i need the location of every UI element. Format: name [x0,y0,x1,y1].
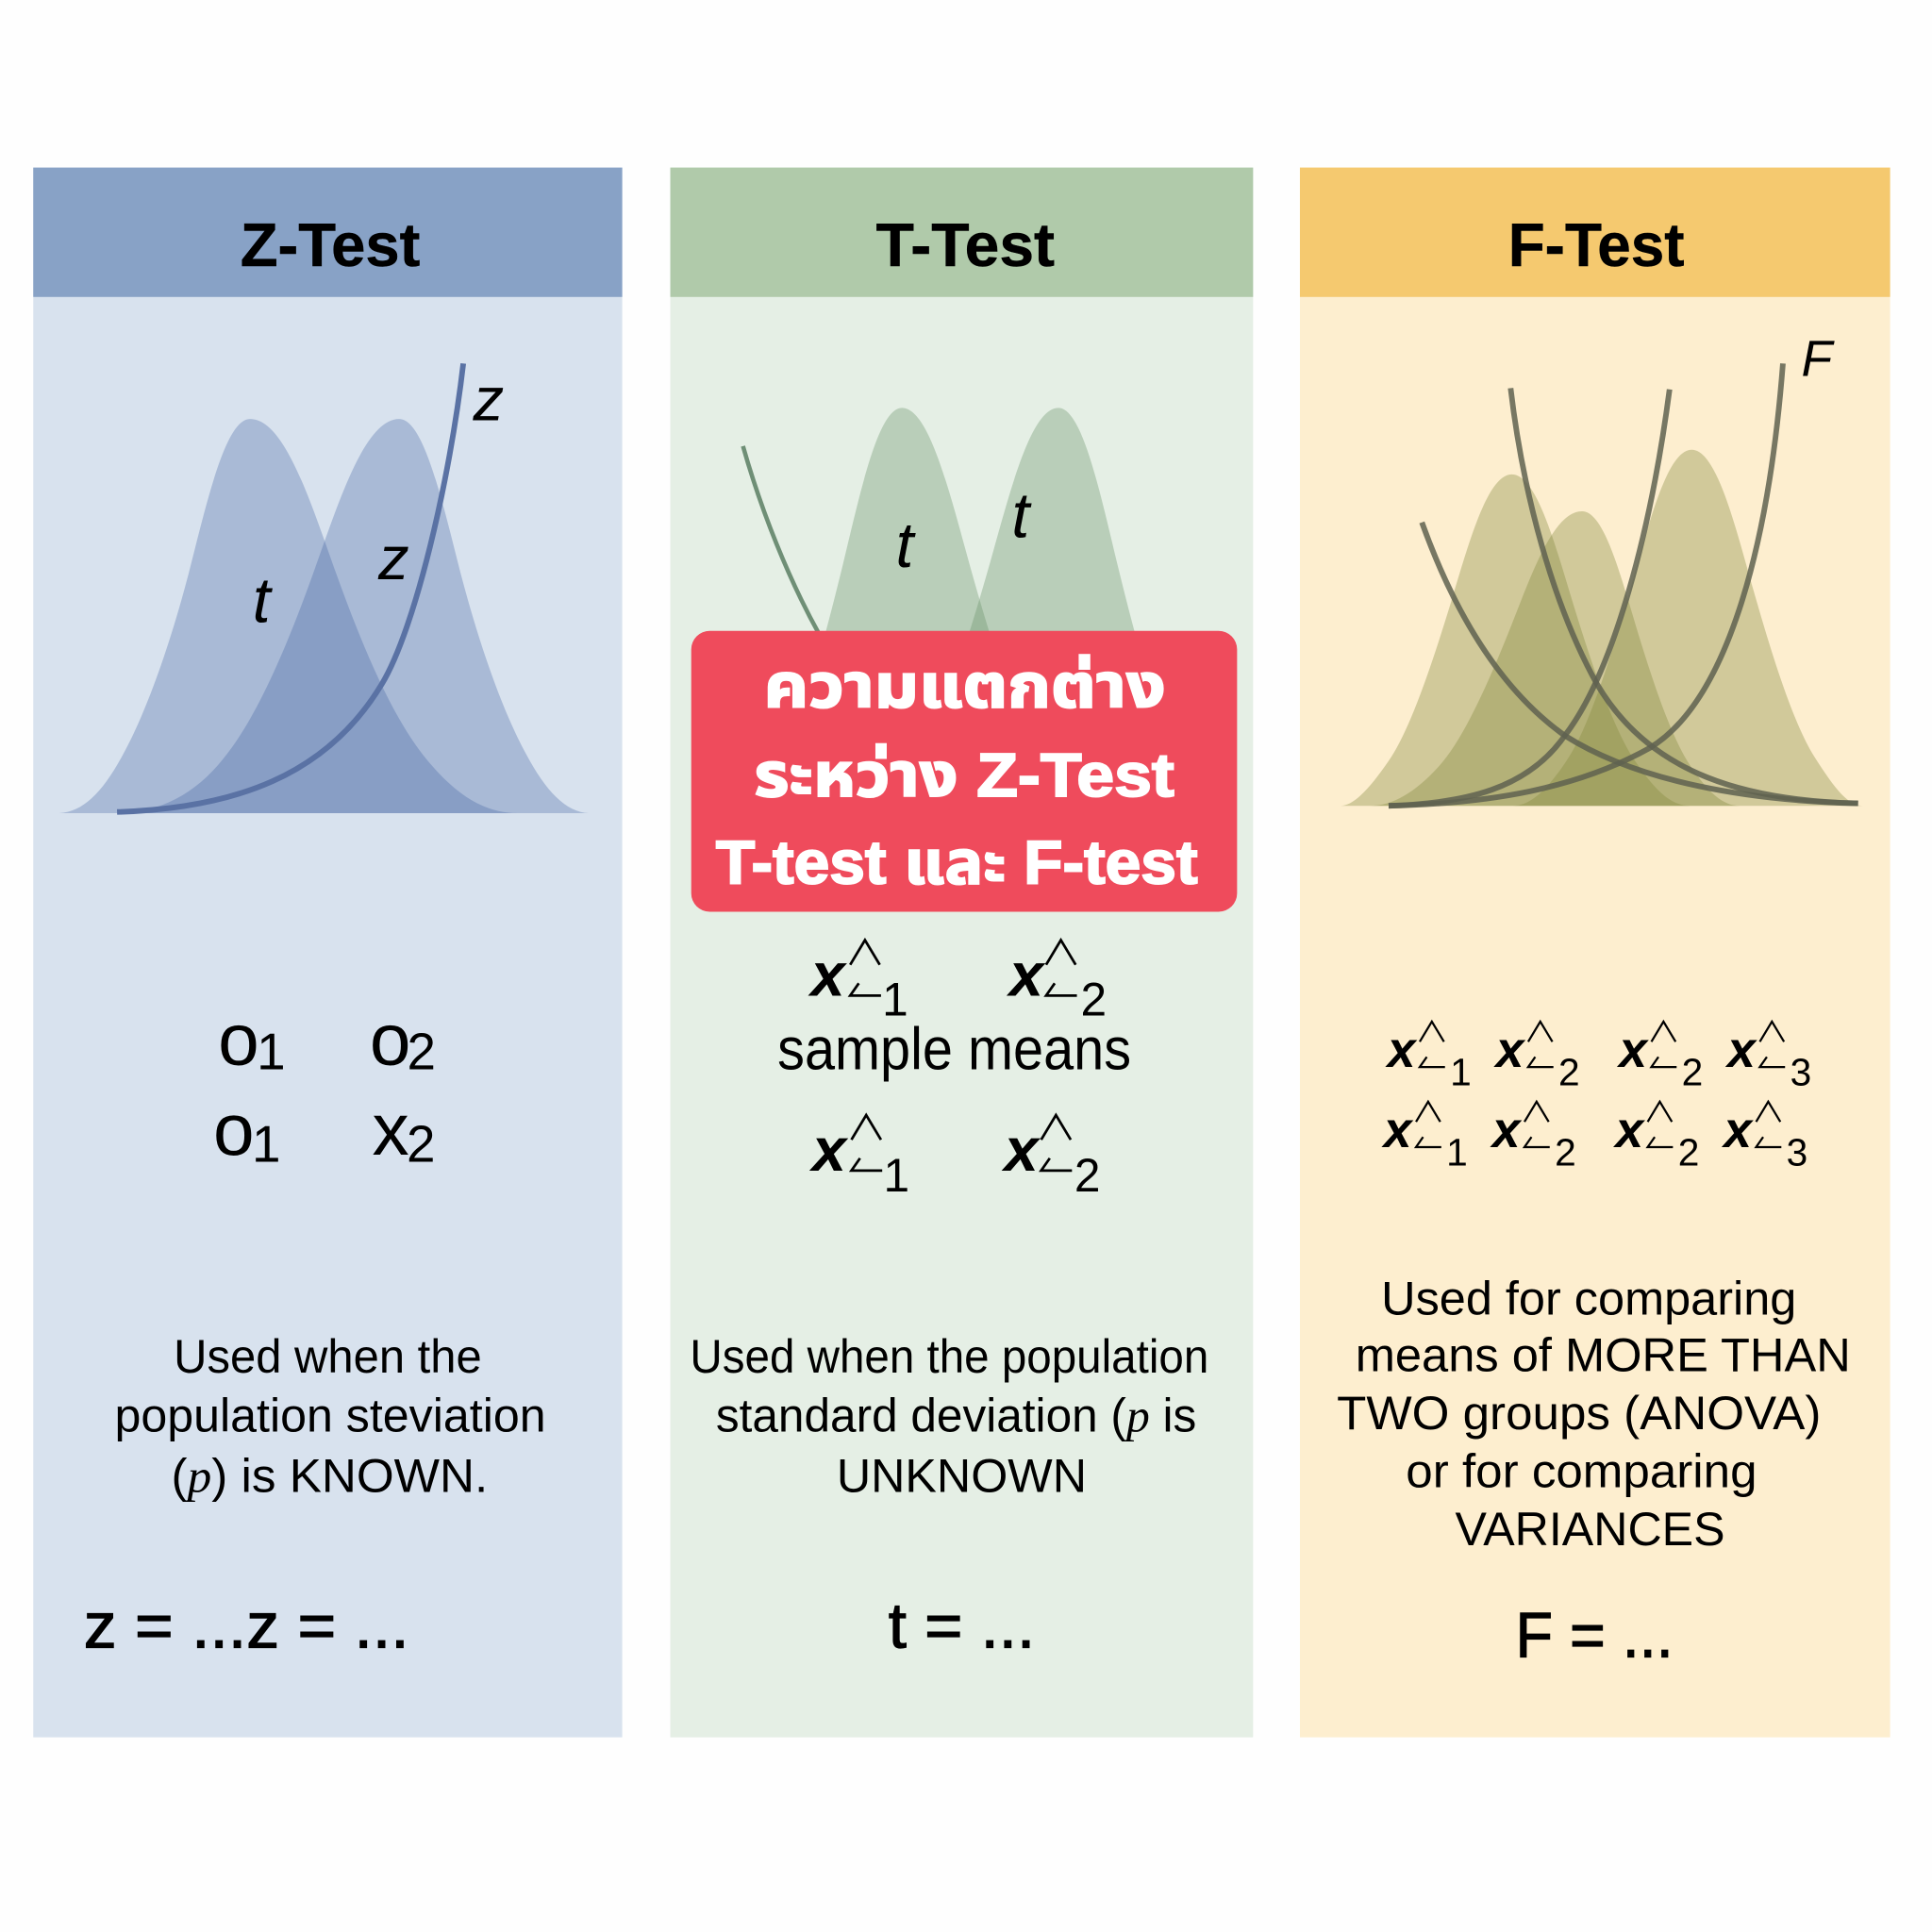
description: T-Test [690,1330,1208,1503]
panel body: T-Test [671,168,1253,1738]
formula: t: t = ... [889,1591,1035,1661]
symbol: x hat 3 row 2: 3 [1787,1130,1807,1174]
symbol: x hat 2 row 2: 2 [1555,1130,1576,1174]
line 1: Used when the [174,1330,482,1383]
symbol: o1 bottom: o [213,1088,255,1171]
symbol: x hat 1 bottom: 1 [883,1149,909,1202]
header band: T-Test [671,168,1253,297]
symbol: x hat 3 row 2 [1721,1102,1807,1174]
distribution curve: right [1513,450,1863,806]
formula: z: z = ...z = ... [84,1591,409,1661]
chart: t distributions [743,408,1176,753]
distribution curve: left [1341,475,1690,806]
line 2: standard deviation (p is [716,1390,1196,1442]
distribution curve: z [117,419,589,813]
distribution curve: t right [921,408,1176,753]
curve label: F: F [1802,331,1836,387]
symbol: x hat 1 row 1: x [1385,1023,1418,1078]
header band: Z-Test [33,168,623,297]
banner line 1: ความแตกต่าง [764,652,1166,721]
line 2: means of MORE THAN [1356,1329,1851,1382]
rising curve: short [1389,390,1670,806]
heading: T-Test: T-Test [876,210,1055,279]
symbol: x hat 1 row 2 [1381,1102,1468,1174]
symbol: o1 top: o [218,997,259,1080]
symbol: x hat 1 bottom: x [809,1115,849,1184]
symbol: o2 top: o [370,997,410,1080]
symbol: x hat 2 row 2 [1490,1102,1576,1174]
distribution curve: t [59,419,518,813]
chart: z distributions [59,363,589,813]
symbol: x hat 1 bottom [809,1115,909,1202]
symbol: x hat 3 row 1: x [1724,1023,1757,1078]
line 4: or for comparing [1406,1444,1757,1497]
curve label: t left: t [896,510,917,581]
symbol: x hat 2 top: x [1007,940,1046,1008]
symbol: x hat 2 row 1: 2 [1558,1050,1580,1093]
rising curve: tall [1389,363,1783,806]
curve label: z upper: z [473,364,504,433]
line 3: TWO groups (ANOVA) [1337,1387,1821,1440]
symbol: x2 bottom: 2 [407,1115,436,1174]
line 1: Used for comparing [1381,1273,1796,1325]
panel: T-Test [671,168,1253,1738]
symbols: group means [1381,1022,1811,1174]
symbol: x hat 1 row 1: 1 [1450,1050,1472,1093]
description: Z-Test [114,1330,546,1503]
symbol: x hat 2b row 1: x [1616,1023,1649,1078]
curve label: t: t [253,566,274,637]
label: sample means: sample means [777,1017,1131,1083]
symbol: x hat 2b row 2: x [1612,1103,1645,1158]
symbol: x hat 1 row 1 [1385,1022,1472,1093]
symbol: x hat 2 bottom: x [1001,1115,1041,1184]
header band: F-Test [1300,168,1890,297]
symbols: sample means [777,940,1131,1202]
heading: F-Test: F-Test [1508,210,1684,279]
heading: Z-Test: Z-Test [241,210,420,279]
symbol: x hat 3 row 1: 3 [1790,1050,1811,1093]
symbol: x hat 2 row 2: x [1490,1103,1523,1158]
symbol: x hat 2 top [1007,940,1107,1025]
symbol: x hat 2 bottom [1001,1115,1101,1202]
symbol: x hat 2 bottom: 2 [1074,1149,1101,1202]
symbol: x hat 1 row 2: x [1381,1103,1414,1158]
line 3: (p) is KNOWN. [172,1450,488,1503]
symbol: x hat 2 row 1 [1493,1022,1580,1093]
description: F-Test [1337,1273,1851,1556]
rising curve: z [117,363,463,812]
symbol: x hat 1 top: x [808,940,847,1008]
falling curve [743,446,820,635]
symbol: x hat 2b row 1 [1616,1022,1703,1093]
line 1: Used when the population [690,1330,1208,1383]
symbol: x hat 2 top: 2 [1080,973,1107,1025]
symbol: o1 top: 1 [257,1023,286,1081]
symbol: x hat 2 row 1: x [1493,1023,1526,1078]
banner: Thai title [691,631,1237,912]
symbol: x hat 1 top: 1 [882,973,908,1025]
falling curve: short [1422,523,1858,804]
panel body: Z-Test [33,168,623,1738]
line 3: UNKNOWN [837,1450,1087,1503]
line 2: population steviation [114,1390,546,1442]
panel body: F-Test [1300,168,1890,1738]
curve label: z inner: z [377,524,409,592]
curve label: t right: t [1011,480,1032,551]
F curves [1389,363,1858,806]
symbol: x hat 1 row 2: 1 [1446,1130,1468,1174]
symbol: o1 bottom: 1 [252,1115,280,1174]
symbol: o2 top: 2 [408,1023,436,1081]
symbol: x hat 1 top [808,940,908,1025]
falling curve: tall [1510,388,1858,804]
chart: F distributions [1341,331,1863,806]
symbol: x hat 2b row 2: 2 [1678,1130,1699,1174]
panel: Z-Test [33,168,623,1738]
panel: F-Test [1300,168,1890,1738]
symbol: x hat 3 row 1 [1724,1022,1811,1093]
distribution curve: t left [784,408,1038,753]
formula: F: F = ... [1516,1601,1674,1672]
symbol: x hat 2b row 1: 2 [1682,1050,1703,1093]
symbol: x hat 2b row 2 [1612,1102,1699,1174]
symbol: x2 bottom: x [372,1088,409,1171]
symbol: x hat 3 row 2: x [1721,1103,1754,1158]
banner background [691,631,1237,912]
distribution curve: middle [1370,511,1740,806]
line 5: VARIANCES [1456,1503,1725,1556]
banner line 3: T-test และ F-test [716,827,1198,896]
symbols: o1 o2 o1 x2 [213,997,436,1174]
banner line 2: ระหว่าง Z-Test [754,741,1174,809]
